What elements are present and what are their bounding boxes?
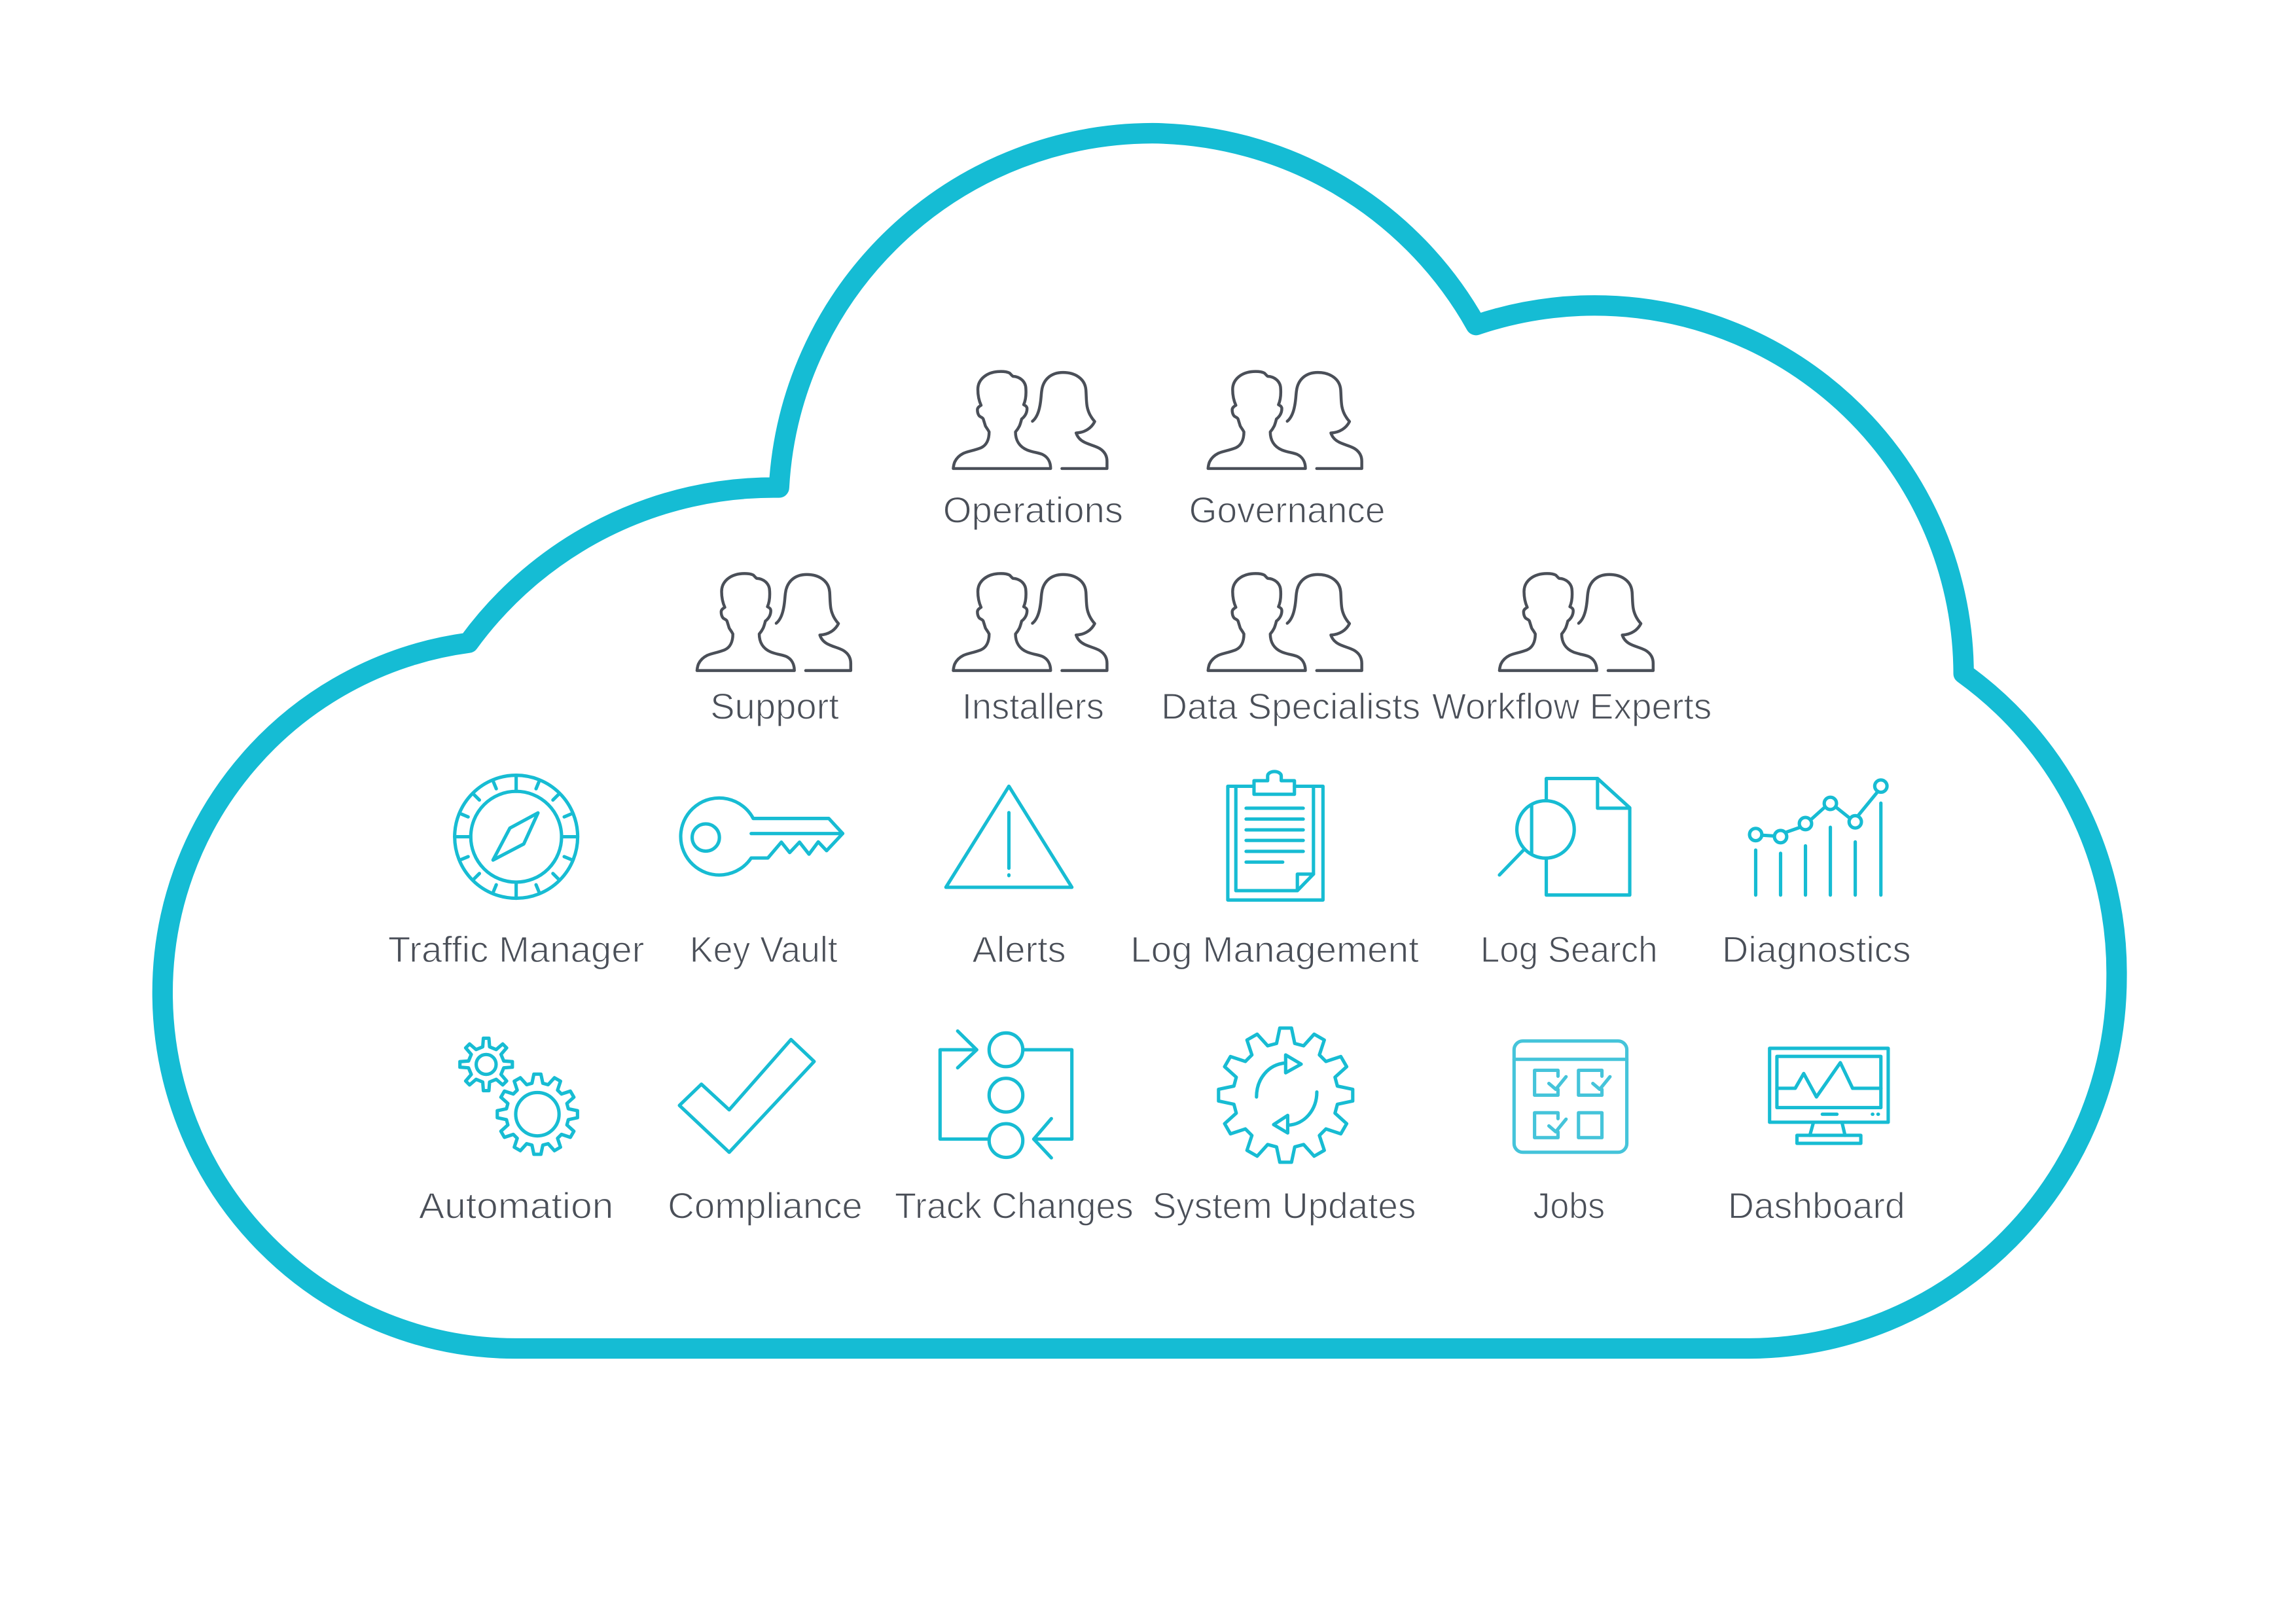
label: Key Vault: Key Vault — [690, 929, 838, 970]
service: Key Vault — [681, 798, 843, 970]
icon: clipboard — [1228, 772, 1323, 900]
role: Governance — [1189, 372, 1385, 531]
icon: gear with arrows — [1219, 1028, 1353, 1162]
icon: people — [953, 372, 1107, 469]
icon: line and bar chart — [1749, 780, 1887, 895]
icon: warning triangle — [946, 786, 1072, 887]
icon: compass — [455, 776, 578, 899]
service: Traffic Manager — [388, 776, 644, 970]
label: Data Specialists: Data Specialists — [1161, 685, 1420, 726]
icon: task board — [1514, 1041, 1627, 1152]
service: System Updates — [1153, 1028, 1416, 1226]
role: Installers — [953, 573, 1107, 726]
label: Log Search: Log Search — [1480, 929, 1658, 970]
icon: people — [697, 573, 851, 671]
role: Workflow Experts — [1432, 573, 1712, 726]
icon: people — [953, 573, 1107, 671]
icon: document with magnifier — [1499, 779, 1630, 895]
label: Governance: Governance — [1189, 490, 1385, 531]
label: Log Management: Log Management — [1130, 929, 1419, 970]
icon: people — [1499, 573, 1653, 671]
label: Dashboard: Dashboard — [1728, 1185, 1905, 1226]
icon: people — [1208, 573, 1362, 671]
service: Compliance — [668, 1039, 863, 1226]
label: System Updates: System Updates — [1153, 1185, 1416, 1226]
service: Diagnostics — [1722, 780, 1911, 970]
service: Automation — [419, 1038, 613, 1226]
service: Jobs — [1514, 1041, 1627, 1226]
cloud outline — [162, 134, 2117, 1349]
service: Alerts — [946, 786, 1072, 970]
icon: gears — [460, 1038, 577, 1154]
label: Automation: Automation — [419, 1185, 613, 1226]
role: Operations — [943, 372, 1123, 531]
label: Installers: Installers — [962, 685, 1104, 726]
icon: monitor — [1770, 1048, 1888, 1143]
service: Log Search — [1480, 779, 1658, 970]
label: Track Changes: Track Changes — [895, 1185, 1134, 1226]
icon: people — [1208, 372, 1362, 469]
label: Alerts: Alerts — [973, 929, 1066, 970]
icon: key — [681, 798, 843, 875]
service: Track Changes — [895, 1031, 1134, 1226]
label: Compliance: Compliance — [668, 1185, 863, 1226]
service: Dashboard — [1728, 1048, 1905, 1226]
label: Operations: Operations — [943, 490, 1123, 531]
icon: check mark — [679, 1039, 814, 1152]
icon: change cycle — [940, 1031, 1072, 1158]
service: Log Management — [1130, 772, 1419, 970]
role: Support — [697, 573, 851, 726]
label: Jobs: Jobs — [1533, 1185, 1605, 1226]
role: Data Specialists — [1161, 573, 1420, 726]
label: Support: Support — [710, 685, 839, 726]
label: Workflow Experts: Workflow Experts — [1432, 685, 1712, 726]
label: Diagnostics: Diagnostics — [1722, 929, 1911, 970]
label: Traffic Manager: Traffic Manager — [388, 929, 644, 970]
